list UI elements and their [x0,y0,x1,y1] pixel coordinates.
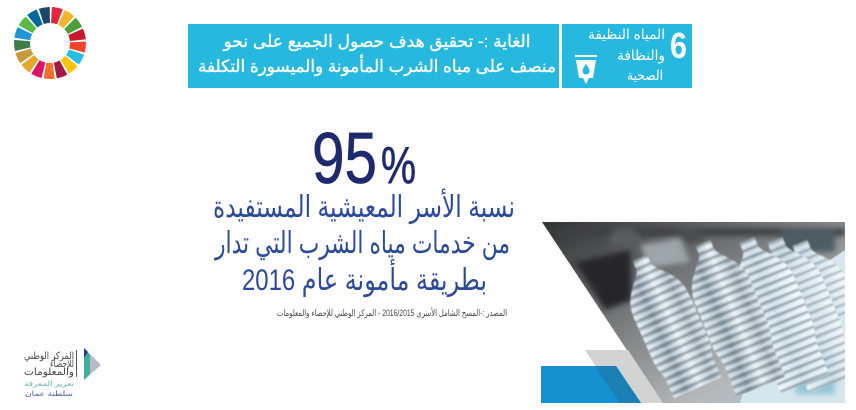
panel: goal 6 tile [562,24,692,88]
target text: الغاية :- تحقيق هدف حصول الجميع على نحو [222,32,530,52]
headline figure 95%: % [381,137,416,195]
target text [198,32,556,76]
goal title: المياه النظيفة [588,26,665,42]
icon: water glass [575,55,597,84]
description text: بطريقة مأمونة عام 2016 [242,258,487,297]
logo text [24,351,74,398]
photo: water bottles on production line [542,222,856,403]
goal title: والنظافة [617,47,665,64]
headline figure 95%: 95 [312,119,377,199]
SDG colour wheel [10,3,90,83]
goal title: الصحية [627,67,663,83]
logo text: سلطنة عمان [25,391,73,398]
logo text: والمعلومات [24,367,74,378]
decorative corner shapes [541,350,663,403]
goal number: 6 [670,25,687,66]
logo text: للإحصاء [50,359,74,370]
description text: من خدمات مياه الشرب التي تدار [214,227,510,261]
panel: target banner [188,24,559,88]
goal title [588,26,665,83]
target text: منصف على مياه الشرب المأمونة والميسورة التكلفة [198,54,556,76]
logo mark [84,348,101,380]
source note: المصدر :-المسح الشامل الأسري 2016/2015 - المركز الوطني للإحصاء والمعلومات [277,307,507,319]
logo text: المركز الوطني [24,351,74,362]
description text [213,187,515,297]
logo: national centre for statistics and information [24,348,101,398]
description text: نسبة الأسر المعيشية المستفيدة [213,187,515,224]
logo text: تعزيز المعرفة [24,381,74,388]
